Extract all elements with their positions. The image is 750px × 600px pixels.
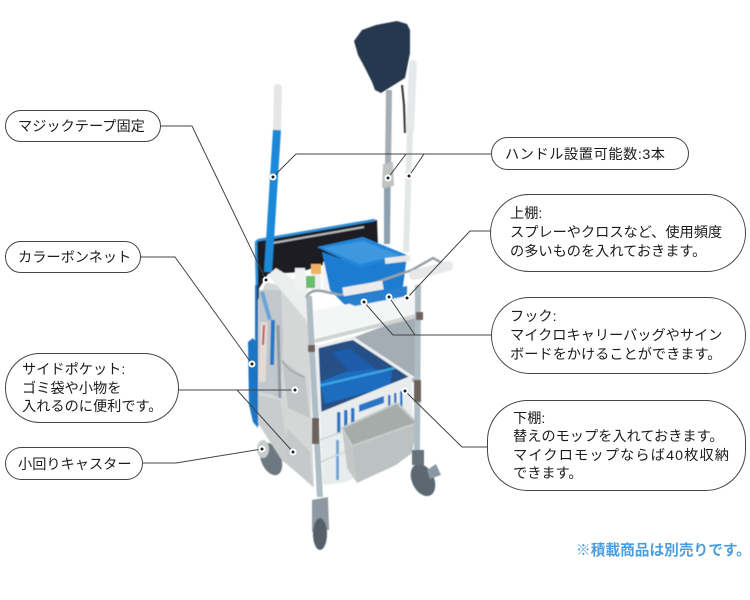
callout: casters: 小回りキャスター — [18, 457, 132, 473]
blue mop handle — [268, 88, 278, 272]
callout: side pocket — [6, 354, 178, 422]
callout: upper shelf: 上棚: — [510, 206, 542, 222]
casters right and front — [312, 450, 441, 550]
front gray bag — [342, 403, 417, 483]
navy bonnet cover — [354, 21, 410, 133]
side pockets — [282, 360, 313, 487]
upper shelf tray — [313, 286, 420, 341]
gray handle — [382, 90, 394, 244]
callout: upper shelf — [490, 194, 746, 272]
bottles — [295, 262, 338, 294]
callout: color bonnet: カラーボンネット — [18, 250, 131, 266]
callout: side pocket: 入れるのに便利です。 — [22, 399, 162, 415]
cart illustration — [248, 21, 448, 550]
back panel — [257, 220, 378, 290]
white handle — [406, 64, 413, 252]
hook handle rail — [306, 258, 448, 298]
hanging mop tool — [259, 290, 283, 398]
callout: handle capacity — [492, 138, 688, 170]
footnote: ※積載商品は別売りです。 — [576, 541, 750, 559]
back panel rail — [273, 227, 364, 243]
clamps — [308, 312, 423, 444]
rear panel behind crate — [352, 314, 417, 385]
callout: lower shelf: 替えのモップを入れておきます。 — [513, 429, 724, 445]
callout: lower shelf: できます。 — [513, 466, 583, 482]
blue bonnet side — [248, 285, 259, 428]
blue bucket — [317, 237, 407, 305]
callout: hook: マイクロキャリーバッグやサイン — [510, 328, 722, 344]
callout: velcro fastening — [6, 110, 160, 142]
callout: casters — [6, 448, 142, 480]
callout: lower shelf: 下棚: — [513, 411, 545, 427]
callout: hook — [492, 298, 746, 374]
callout: hook: フック: — [510, 309, 557, 325]
callout: side pocket: ゴミ袋や小物を — [22, 380, 121, 397]
gray side bag — [258, 282, 314, 487]
callout: velcro fastening: マジックテープ固定 — [18, 119, 145, 135]
frame posts — [309, 285, 418, 497]
leader lines and dots — [140, 126, 491, 463]
callout: upper shelf: スプレーやクロスなど、使用頻度 — [510, 224, 722, 241]
lower crate — [317, 338, 413, 485]
callout: side pocket: サイドポケット: — [22, 362, 125, 378]
callout: handle capacity: ハンドル設置可能数:3本 — [505, 147, 665, 163]
blue mop in crate — [317, 340, 410, 413]
callout: hook: ボードをかけることができます。 — [510, 347, 721, 363]
caster left — [255, 439, 287, 479]
upper tray side — [268, 268, 313, 345]
callout: lower shelf: マイクロモップならば40枚収納 — [513, 448, 729, 464]
callout: lower shelf — [488, 400, 746, 490]
callout: color bonnet — [6, 242, 140, 272]
callout: upper shelf: の多いものを入れておきます。 — [510, 244, 706, 260]
